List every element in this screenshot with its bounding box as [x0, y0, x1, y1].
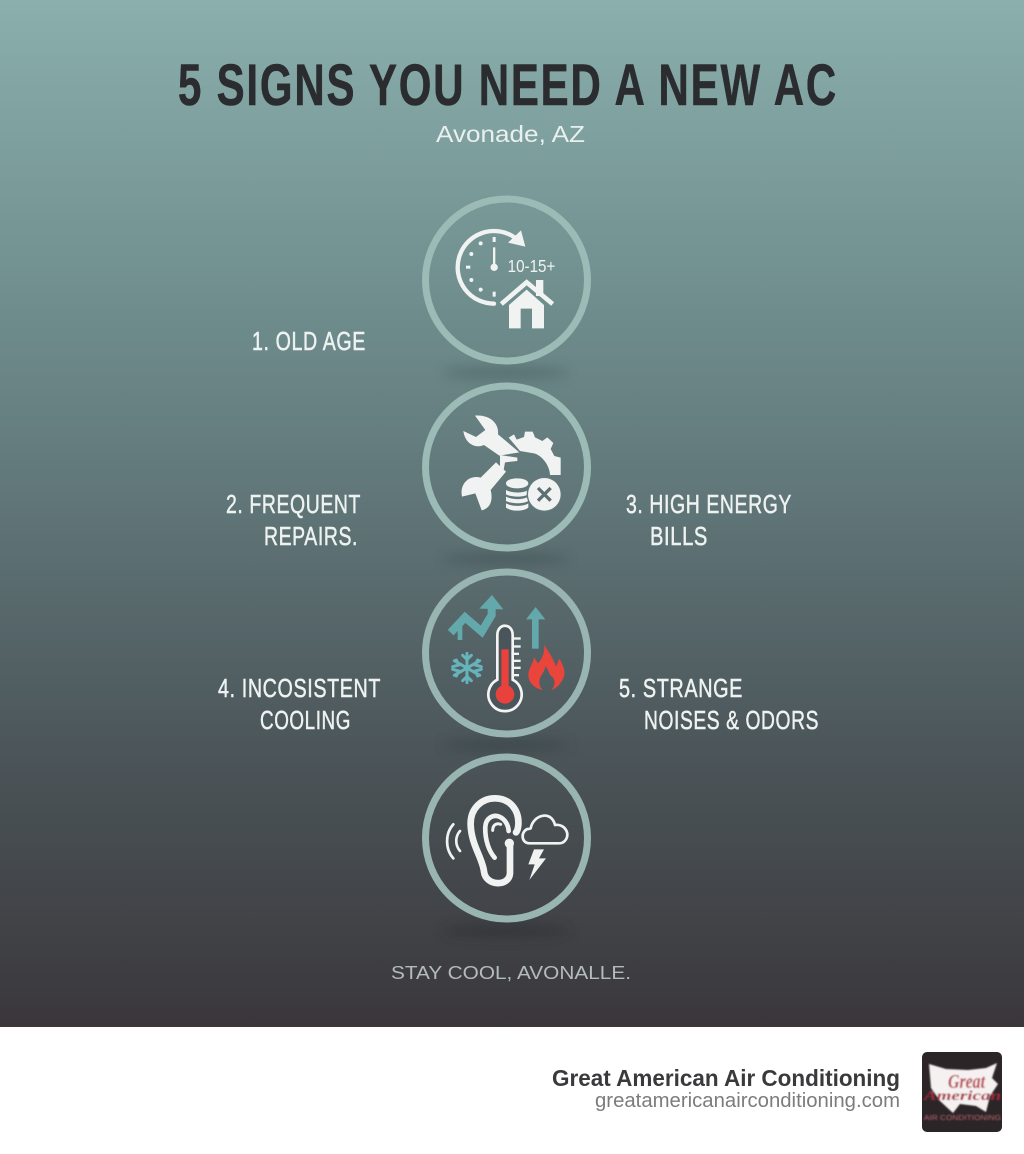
company logo: American — [923, 1089, 1001, 1104]
circle 3: temperature icon — [426, 572, 588, 751]
company name: Great American Air Conditioning — [552, 1065, 900, 1091]
label: sign 2 — [226, 489, 361, 551]
label: sign 5: 5. STRANGE — [619, 673, 743, 703]
label: sign 1: 1. OLD AGE — [252, 326, 366, 356]
label: sign 3 — [626, 489, 792, 551]
company website: greatamericanairconditioning.com — [595, 1090, 900, 1112]
label: sign 2: REPAIRS. — [264, 521, 358, 551]
ring — [426, 757, 588, 919]
circle 1: old age icon — [426, 199, 588, 379]
label: sign 5: NOISES & ODORS — [644, 705, 819, 735]
circle shadow — [442, 367, 570, 379]
icon: clock and house — [458, 230, 555, 328]
label: sign 2: 2. FREQUENT — [226, 489, 361, 519]
label: sign 5 — [619, 673, 819, 735]
circle shadow — [442, 739, 570, 751]
label: sign 4 — [218, 673, 381, 735]
closing tagline: STAY COOL, AVONALLE. — [391, 962, 631, 983]
circle shadow — [442, 553, 570, 565]
company logo: Great — [948, 1071, 986, 1093]
footer panel — [0, 1027, 1024, 1154]
label: sign 4: COOLING — [260, 705, 351, 735]
circle 4: noises and odors icon — [426, 757, 588, 937]
circle 2: wrenches, gear and coins icon — [426, 386, 588, 565]
label: sign 4: 4. INCOSISTENT — [218, 673, 381, 703]
circle shadow — [442, 925, 570, 937]
ring — [426, 199, 588, 361]
icon: clock and house: 10-15+ — [508, 256, 555, 276]
ring — [426, 572, 588, 734]
icon: thermometer, snowflake, flame, arrows — [451, 595, 564, 711]
label: sign 3: 3. HIGH ENERGY — [626, 489, 792, 519]
company logo: AIR CONDITIONING — [924, 1115, 1001, 1122]
icon: repairs — [462, 416, 562, 512]
icon: ear, sound waves, storm cloud — [447, 798, 567, 883]
subtitle: Avonade, AZ — [436, 121, 585, 147]
label: sign 3: BILLS — [650, 521, 708, 551]
company logo — [922, 1052, 1002, 1132]
ring — [426, 386, 588, 548]
